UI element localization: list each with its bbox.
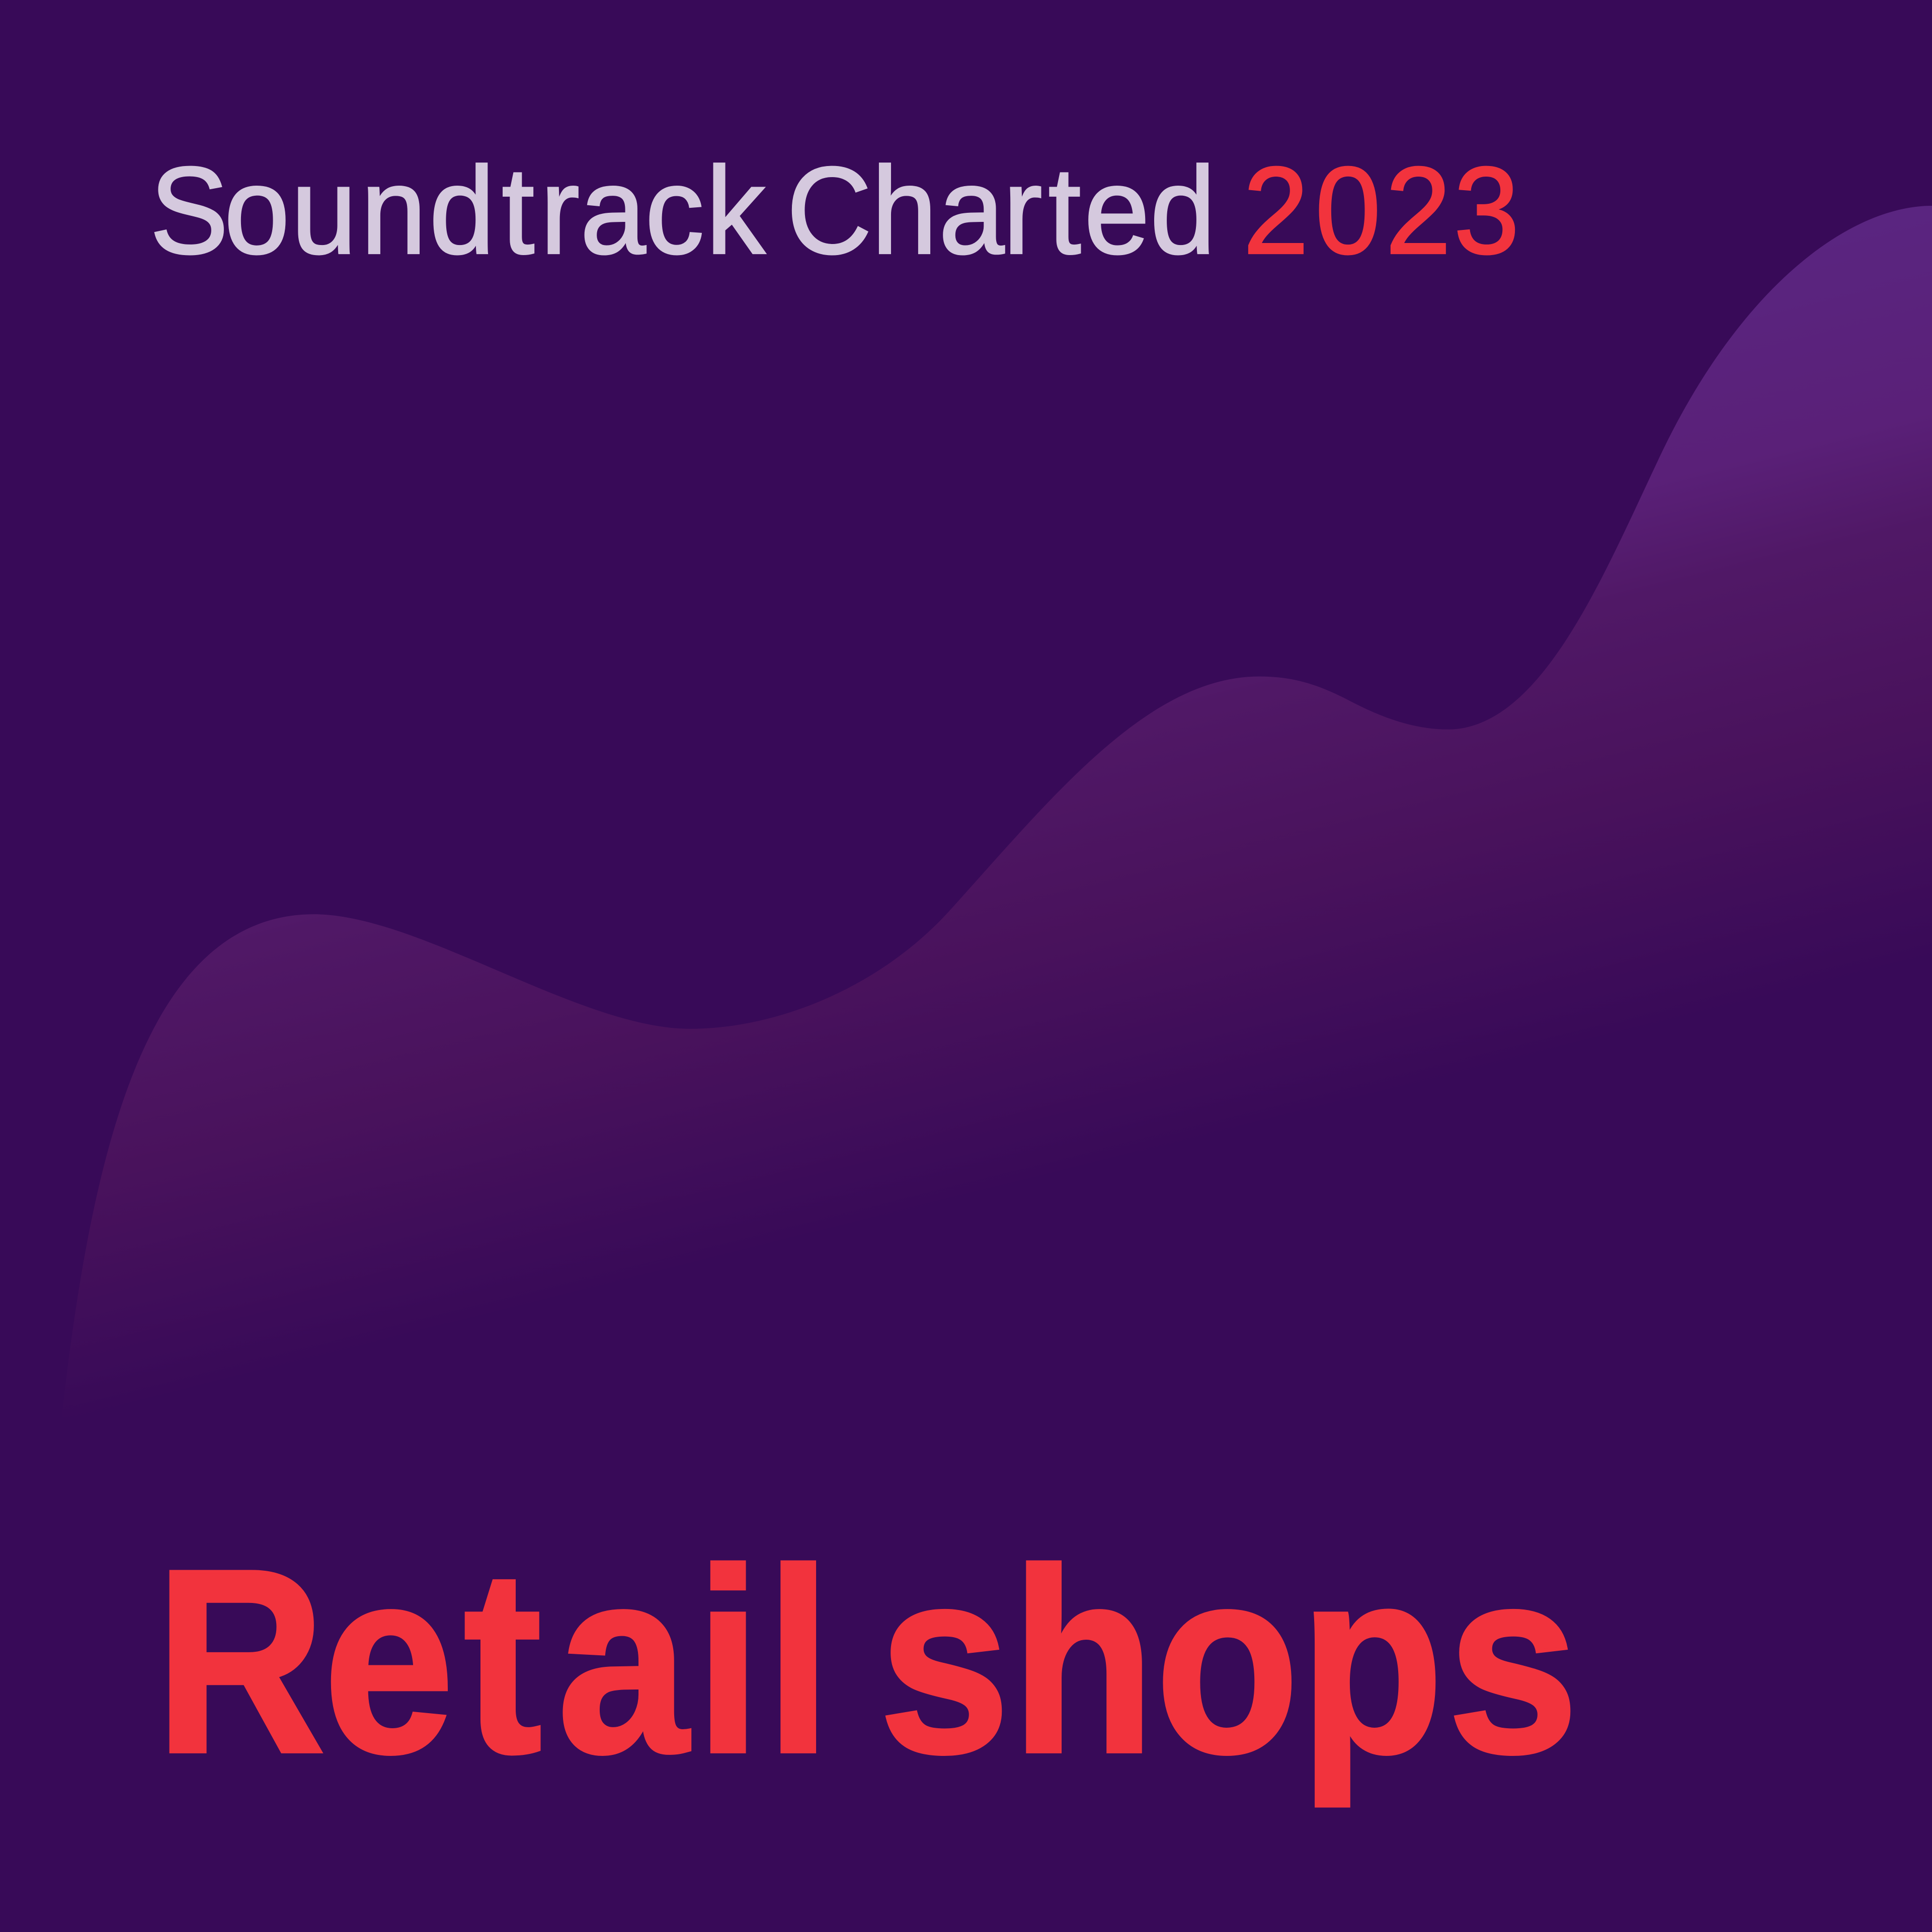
- heading: Retail shops: Retail shops: [155, 1515, 1578, 1809]
- title: Soundtrack Charted 2023: [150, 141, 1519, 280]
- area chart wave: [61, 206, 1932, 1417]
